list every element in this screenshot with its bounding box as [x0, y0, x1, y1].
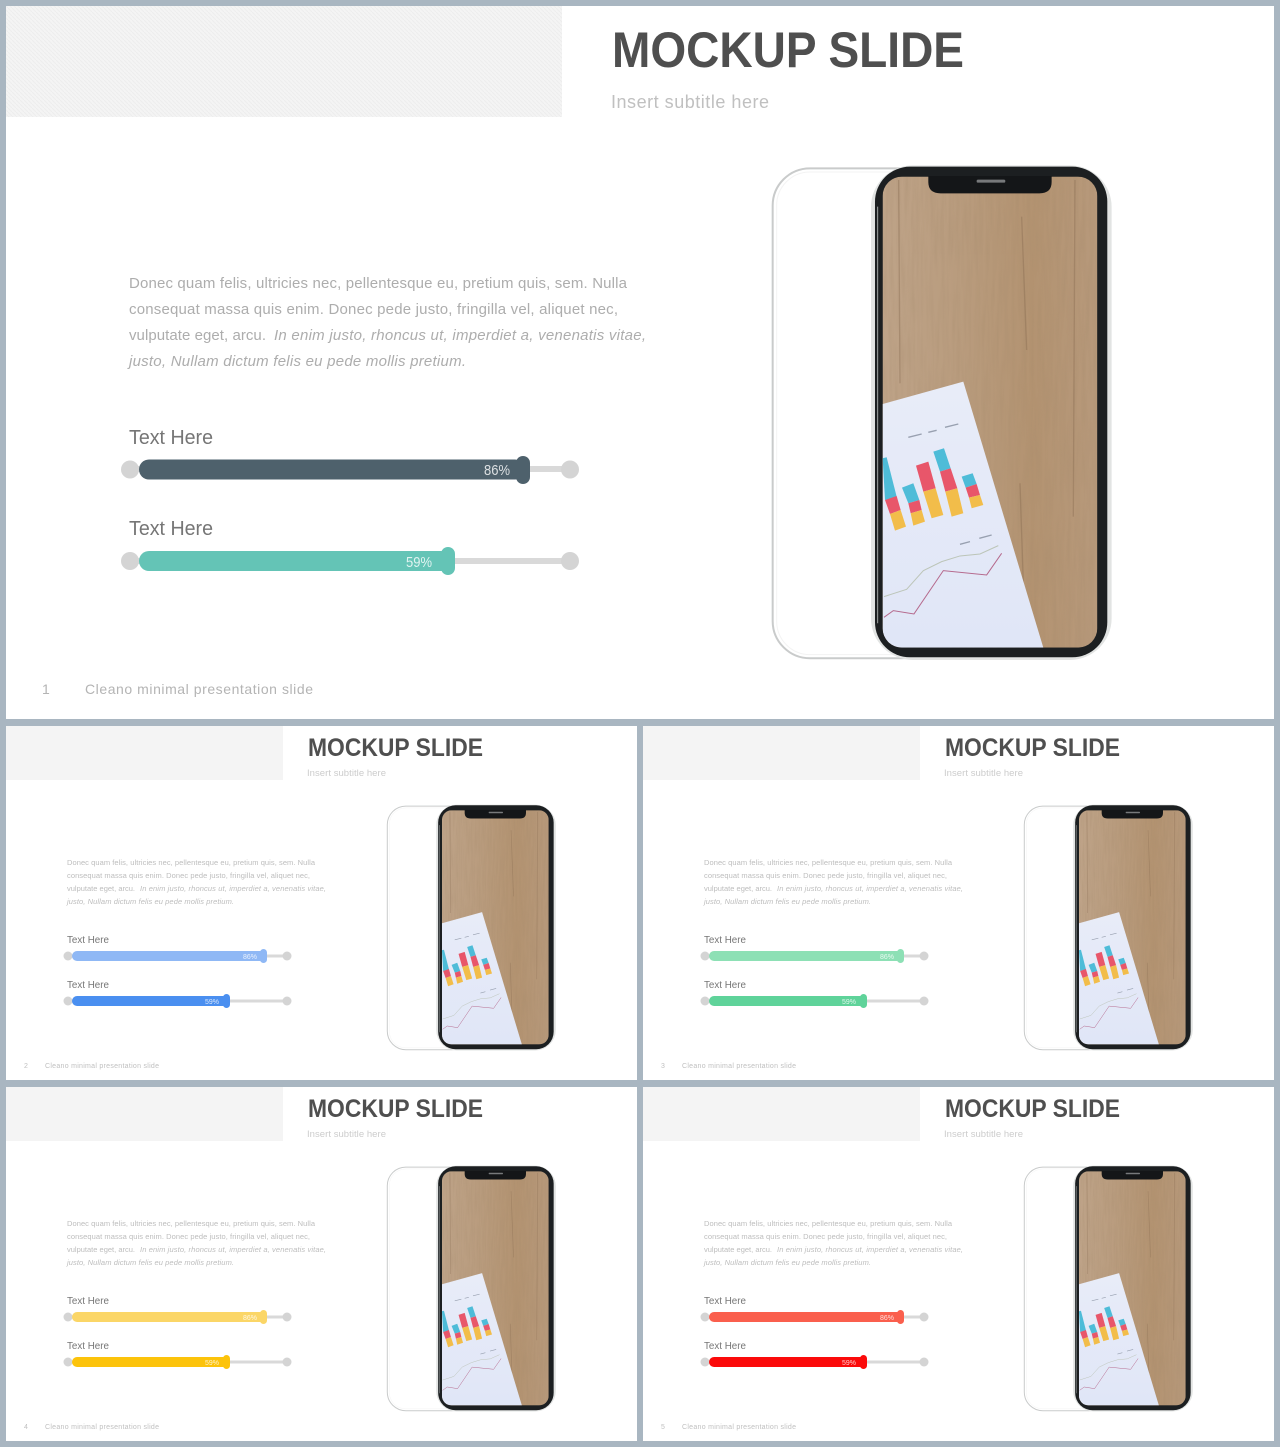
footer: 4 [24, 1424, 28, 1431]
body text: In enim justo, rhoncus ut, imperdiet a, venenatis vitae, [140, 1245, 326, 1254]
progress bar: 86%: 86% [484, 462, 510, 479]
body text: In enim justo, rhoncus ut, imperdiet a, venenatis vitae, [777, 884, 963, 893]
progress bar: 86%: 86% [880, 952, 894, 961]
body text: justo, Nullam dictum felis eu pede mollis pretium. [66, 897, 234, 906]
subtitle: Insert subtitle here [307, 768, 386, 779]
body text [66, 858, 326, 906]
header banner [643, 726, 920, 780]
subtitle: Insert subtitle here [611, 92, 769, 112]
header banner [6, 6, 562, 117]
progress bar: 59%: 59% [842, 997, 856, 1006]
body text [127, 275, 646, 370]
body text: vulputate eget, arcu. [704, 884, 772, 893]
progress bar: 59%: Text Here [67, 1341, 109, 1352]
body text: justo, Nullam dictum felis eu pede mollis pretium. [703, 897, 871, 906]
panel: slide 2 blue [6, 726, 637, 1080]
body text [703, 1219, 963, 1267]
body text: Donec quam felis, ultricies nec, pellentesque eu, pretium quis, sem. Nulla [67, 1219, 316, 1228]
progress bar: 59%: 59% [406, 554, 432, 571]
body text: In enim justo, rhoncus ut, imperdiet a, venenatis vitae, [777, 1245, 963, 1254]
progress bar: 86% [121, 427, 579, 484]
footer: 2 [24, 1063, 28, 1070]
footer: Cleano minimal presentation slide [45, 1063, 159, 1070]
progress bar: 86%: Text Here [704, 935, 746, 946]
phone mockup [387, 1166, 556, 1412]
progress bar: 86%: Text Here [67, 1296, 109, 1307]
body text: Donec quam felis, ultricies nec, pellentesque eu, pretium quis, sem. Nulla [129, 275, 628, 292]
panel: slide 3 green [643, 726, 1274, 1080]
progress bar: 86%: Text Here [129, 427, 213, 449]
progress bar: 59%: 59% [842, 1358, 856, 1367]
footer: 3 [661, 1063, 665, 1070]
progress bar: 86% [700, 935, 928, 963]
progress bar: 59%: Text Here [67, 980, 109, 991]
phone mockup [773, 165, 1112, 660]
header banner [643, 1087, 920, 1141]
progress bar: 59%: Text Here [704, 980, 746, 991]
body text: consequat massa quis enim. Donec pede justo, fringilla vel, aliquet nec, [704, 871, 947, 880]
title: MOCKUP SLIDE [945, 1095, 1120, 1123]
body text: Donec quam felis, ultricies nec, pellentesque eu, pretium quis, sem. Nulla [704, 1219, 953, 1228]
panel: slide 4 yellow [6, 1087, 637, 1441]
footer: Cleano minimal presentation slide [85, 681, 313, 697]
phone mockup [1024, 1166, 1193, 1412]
progress bar: 59% [64, 1341, 292, 1369]
progress bar: 86%: Text Here [67, 935, 109, 946]
progress bar: 59%: 59% [205, 1358, 219, 1367]
body text: consequat massa quis enim. Donec pede justo, fringilla vel, aliquet nec, [704, 1232, 947, 1241]
progress bar: 59% [700, 1341, 928, 1369]
progress bar: 59%: Text Here [129, 518, 213, 540]
body text: In enim justo, rhoncus ut, imperdiet a, venenatis vitae, [274, 327, 646, 344]
progress bar: 59% [700, 980, 928, 1008]
body text [66, 1219, 326, 1267]
progress bar: 86% [700, 1296, 928, 1324]
header banner [6, 1087, 283, 1141]
body text: Donec quam felis, ultricies nec, pellentesque eu, pretium quis, sem. Nulla [67, 858, 316, 867]
phone mockup [1024, 805, 1193, 1051]
progress bar: 59%: 59% [205, 997, 219, 1006]
subtitle: Insert subtitle here [944, 768, 1023, 779]
progress bar: 59% [121, 518, 579, 575]
subtitle: Insert subtitle here [944, 1129, 1023, 1140]
panel: slide 5 red [643, 1087, 1274, 1441]
progress bar: 59%: Text Here [704, 1341, 746, 1352]
body text: Donec quam felis, ultricies nec, pellentesque eu, pretium quis, sem. Nulla [704, 858, 953, 867]
progress bar: 86%: Text Here [704, 1296, 746, 1307]
title: MOCKUP SLIDE [308, 1095, 483, 1123]
body text: vulputate eget, arcu. [704, 1245, 772, 1254]
title: MOCKUP SLIDE [308, 734, 483, 762]
body text: vulputate eget, arcu. [67, 884, 135, 893]
panel: main slide [6, 6, 1274, 719]
body text: justo, Nullam dictum felis eu pede mollis pretium. [127, 353, 466, 370]
body text: In enim justo, rhoncus ut, imperdiet a, venenatis vitae, [140, 884, 326, 893]
progress bar: 86% [64, 935, 292, 963]
phone mockup [387, 805, 556, 1051]
footer: 5 [661, 1424, 665, 1431]
subtitle: Insert subtitle here [307, 1129, 386, 1140]
body text: consequat massa quis enim. Donec pede justo, fringilla vel, aliquet nec, [67, 871, 310, 880]
body text: vulputate eget, arcu. [129, 327, 266, 344]
body text: consequat massa quis enim. Donec pede justo, fringilla vel, aliquet nec, [129, 301, 618, 318]
footer: Cleano minimal presentation slide [682, 1063, 796, 1070]
body text: vulputate eget, arcu. [67, 1245, 135, 1254]
footer: 1 [42, 681, 50, 697]
progress bar: 86%: 86% [880, 1313, 894, 1322]
title: MOCKUP SLIDE [945, 734, 1120, 762]
body text: consequat massa quis enim. Donec pede justo, fringilla vel, aliquet nec, [67, 1232, 310, 1241]
body text [703, 858, 963, 906]
progress bar: 59% [64, 980, 292, 1008]
progress bar: 86%: 86% [243, 1313, 257, 1322]
footer: Cleano minimal presentation slide [45, 1424, 159, 1431]
title: MOCKUP SLIDE [612, 22, 964, 78]
progress bar: 86%: 86% [243, 952, 257, 961]
header banner [6, 726, 283, 780]
progress bar: 86% [64, 1296, 292, 1324]
body text: justo, Nullam dictum felis eu pede mollis pretium. [703, 1258, 871, 1267]
footer: Cleano minimal presentation slide [682, 1424, 796, 1431]
body text: justo, Nullam dictum felis eu pede mollis pretium. [66, 1258, 234, 1267]
